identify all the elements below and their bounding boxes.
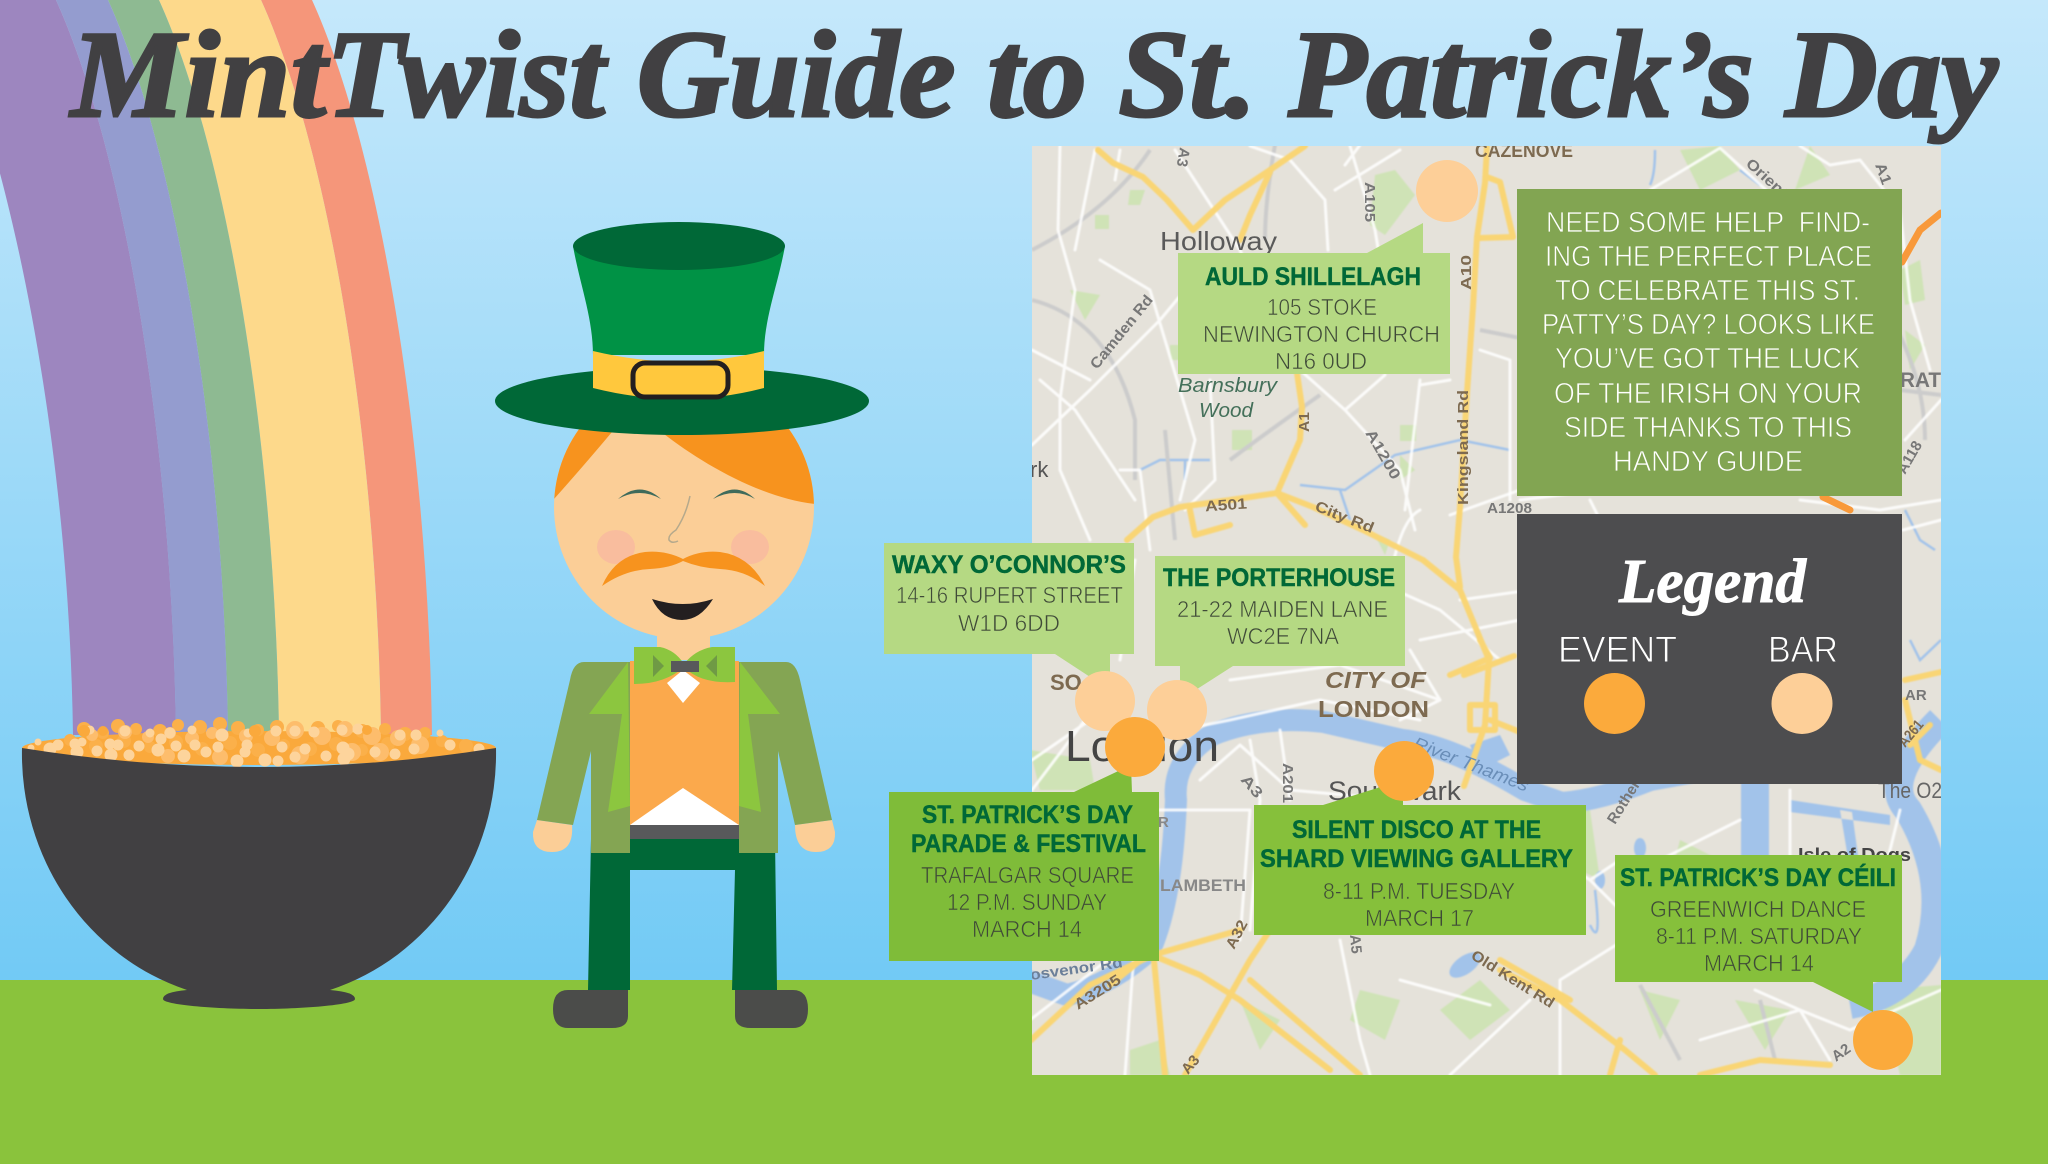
- right shoe: [735, 990, 808, 1028]
- panel: intro text: TO CELEBRATE THIS ST.: [1555, 275, 1860, 307]
- panel: intro text: PATTY’S DAY? LOOKS LIKE: [1542, 309, 1875, 341]
- event marker: Greenwich: [1853, 1010, 1913, 1070]
- map place labels: Holloway: [1160, 226, 1277, 256]
- map: [1020, 141, 1942, 1078]
- map place labels: A3205: [1071, 971, 1124, 1013]
- grass ground: [0, 980, 2048, 1164]
- left shoe: [553, 990, 628, 1028]
- hat top: [573, 222, 785, 270]
- yellow roads: [1031, 146, 1941, 1075]
- belt: [630, 825, 739, 839]
- panel: intro text: ING THE PERFECT PLACE: [1545, 241, 1872, 273]
- callout: Silent Disco: 8-11 P.M. TUESDAY: [1323, 878, 1515, 904]
- callout: St. Patrick's Day Ceili: MARCH 14: [1704, 950, 1814, 976]
- callout: Auld Shillelagh: AULD SHILLELAGH: [1205, 263, 1421, 291]
- lapels: [589, 662, 780, 812]
- nose: [669, 496, 690, 542]
- legend heading: Legend: [1618, 548, 1807, 616]
- hat buckle: [633, 363, 728, 397]
- event marker: Shard: [1374, 741, 1434, 801]
- hat crown: [573, 246, 785, 355]
- white roads: [1030, 145, 1941, 1075]
- map place labels: The O2: [1878, 778, 1942, 803]
- map base: [1032, 146, 1941, 1075]
- map place labels: Southwark: [1328, 776, 1462, 806]
- callout: St. Patrick's Day Ceili: 8-11 P.M. SATURDAY: [1656, 923, 1862, 949]
- map place labels: A1: [1871, 161, 1895, 187]
- callout: The Porterhouse: WC2E 7NA: [1227, 623, 1340, 649]
- map place labels: CAZENOVE: [1475, 141, 1573, 161]
- map place labels: A3: [1237, 772, 1266, 802]
- map place labels: A261: [1895, 717, 1927, 751]
- legs and trousers: [588, 839, 777, 990]
- gold coins: [22, 717, 496, 767]
- panel: intro text: NEED SOME HELP FIND-: [1546, 207, 1870, 239]
- map place labels: A1: [1296, 412, 1313, 432]
- callout: Silent Disco: SHARD VIEWING GALLERY: [1260, 845, 1573, 873]
- map place labels: AR: [1905, 687, 1927, 704]
- orange motorway: [1823, 213, 1941, 510]
- cauldron bowl: [22, 748, 496, 1009]
- callout: St. Patrick's Day Parade: MARCH 14: [972, 916, 1082, 942]
- moustache: [602, 552, 765, 586]
- map place labels: A2: [1829, 1040, 1854, 1065]
- map place labels: A3: [1173, 146, 1193, 168]
- map place labels: A5: [1346, 934, 1365, 954]
- callout: Silent Disco: SILENT DISCO AT THE: [1292, 816, 1541, 844]
- callout: Waxy O'Connor's: [884, 543, 1134, 690]
- bow tie: [634, 647, 735, 684]
- callout: Waxy O'Connor's: WAXY O’CONNOR’S: [892, 551, 1126, 579]
- map place labels: A201: [1279, 763, 1296, 803]
- callout: St. Patrick's Day Ceili: ST. PATRICK’S DAY CÉILI: [1620, 863, 1896, 892]
- map place labels: City Rd: [1313, 498, 1376, 537]
- legend label: bar: BAR: [1768, 629, 1838, 670]
- map place labels: Camden Rd: [1087, 292, 1157, 373]
- map place labels: A105: [1361, 182, 1378, 222]
- leprechaun: [495, 222, 869, 1028]
- map place labels: R: [1158, 814, 1169, 831]
- callout: Auld Shillelagh: 105 STOKE: [1267, 294, 1377, 320]
- callout: The Porterhouse: THE PORTERHOUSE: [1163, 564, 1395, 592]
- panel: intro text: YOU’VE GOT THE LUCK: [1555, 343, 1861, 375]
- callout: St. Patrick's Day Ceili: GREENWICH DANCE: [1650, 896, 1866, 922]
- hat band: [593, 351, 764, 399]
- map place labels: RAT: [1900, 369, 1941, 392]
- map place labels: A1208: [1487, 500, 1532, 517]
- map place labels: SO: [1050, 670, 1082, 695]
- river Thames: [1020, 150, 1941, 1005]
- map place labels: CITY OF: [1325, 667, 1427, 693]
- callout: St. Patrick's Day Parade: 12 P.M. SUNDAY: [947, 889, 1107, 915]
- callout: The Porterhouse: 21-22 MAIDEN LANE: [1177, 596, 1388, 622]
- map place labels: A1200: [1362, 426, 1404, 483]
- panel: intro text: SIDE THANKS TO THIS: [1564, 412, 1852, 444]
- pot of gold: [22, 717, 496, 1009]
- callout: The Porterhouse: [1155, 556, 1405, 700]
- callout: Waxy O'Connor's: W1D 6DD: [958, 610, 1060, 636]
- cheeks: [597, 530, 769, 564]
- map place labels: A3: [1178, 1052, 1203, 1078]
- map place labels: Isle of Dogs: [1798, 845, 1911, 865]
- legend swatch: bar: [1772, 673, 1832, 734]
- callout: St. Patrick's Day Ceili: [1615, 855, 1902, 1012]
- eyes: [618, 490, 755, 499]
- bar marker: The Porterhouse: [1147, 680, 1207, 740]
- hat: [495, 222, 869, 435]
- shirt collar: [667, 670, 700, 703]
- panel: intro text: [1517, 189, 1902, 496]
- callout: Silent Disco: [1254, 780, 1586, 935]
- jacket: [537, 662, 832, 853]
- callout: St. Patrick's Day Parade: ST. PATRICK’S DAY: [922, 801, 1133, 829]
- hat brim: [495, 367, 869, 435]
- mouth: [652, 599, 713, 620]
- map place labels: London: [1065, 722, 1219, 771]
- neck: [657, 630, 710, 660]
- head: [554, 375, 814, 639]
- map place labels: Wood: [1199, 400, 1254, 422]
- map place labels: osvenor Rd: [1029, 954, 1124, 984]
- map parks: [1030, 146, 1941, 1075]
- title: MintTwist Guide to St. Patrick’s Day: [69, 6, 1999, 143]
- bar marker: Waxy O'Connor's: [1075, 671, 1135, 731]
- callout: St. Patrick's Day Parade: TRAFALGAR SQUARE: [921, 862, 1134, 888]
- callout: Auld Shillelagh: [1178, 223, 1450, 374]
- panel: legend: [1517, 514, 1902, 784]
- rainbow: [0, 0, 432, 735]
- callout: Silent Disco: MARCH 17: [1365, 905, 1474, 931]
- map place labels: rk: [1030, 457, 1049, 482]
- hands: [533, 820, 835, 852]
- waistcoat white hem: [630, 788, 739, 825]
- map place labels: A501: [1204, 495, 1248, 515]
- map place labels: [1029, 141, 1942, 1078]
- panel: intro text: HANDY GUIDE: [1613, 446, 1803, 478]
- map place labels: Orient: [1742, 155, 1791, 201]
- map place labels: A118: [1894, 438, 1926, 477]
- callout: St. Patrick's Day Parade: [889, 765, 1159, 961]
- hair: [554, 428, 814, 504]
- map place labels: River Thames: [1411, 733, 1532, 795]
- legend label: event: EVENT: [1558, 629, 1677, 670]
- rail lines: [1032, 145, 1941, 1060]
- map place labels: A32: [1223, 917, 1252, 952]
- map place labels: LAMBETH: [1160, 876, 1246, 895]
- map place labels: Barnsbury: [1178, 375, 1278, 397]
- map place labels: A10: [1458, 255, 1475, 290]
- legend swatch: event: [1584, 673, 1645, 734]
- event marker: Trafalgar Square: [1105, 717, 1165, 777]
- callout: Waxy O'Connor's: 14-16 RUPERT STREET: [896, 582, 1123, 608]
- map place labels: Old Kent Rd: [1468, 947, 1557, 1012]
- map place labels: LONDON: [1318, 696, 1429, 722]
- bar marker: Auld Shillelagh: [1416, 160, 1478, 222]
- callout: Auld Shillelagh: N16 0UD: [1275, 348, 1367, 374]
- map place labels: Rotherhithe: [1604, 747, 1663, 827]
- panel: intro text: OF THE IRISH ON YOUR: [1554, 378, 1862, 410]
- map place labels: Kingsland Rd: [1455, 390, 1472, 505]
- callout: Auld Shillelagh: NEWINGTON CHURCH: [1203, 321, 1440, 347]
- waistcoat: [630, 661, 739, 825]
- callout: St. Patrick's Day Parade: PARADE & FESTIVAL: [911, 830, 1146, 858]
